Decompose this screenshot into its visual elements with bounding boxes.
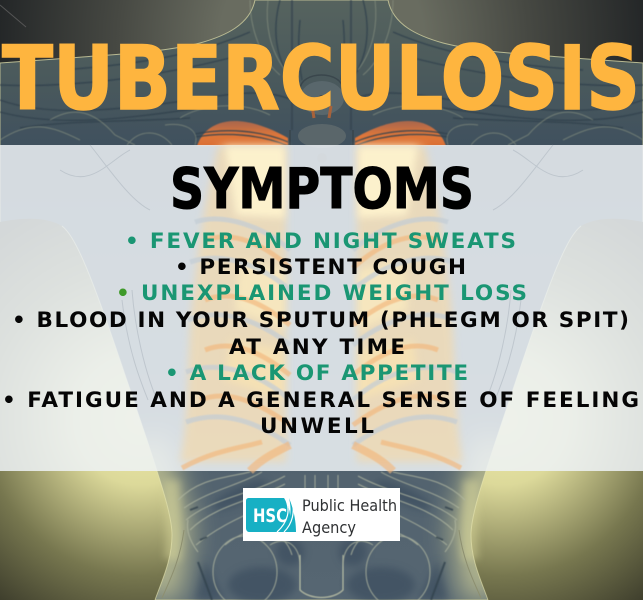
symptom: fatigue: • FATIGUE AND A GENERAL SENSE OF FEELING — [2, 388, 639, 413]
symptom: blood in sputum: • BLOOD IN YOUR SPUTUM (PHLEGM OR SPIT) — [12, 308, 629, 333]
symptom: fever and night sweats: • FEVER AND NIGHT SWEATS — [125, 229, 516, 254]
symptom: unexplained weight loss: • UNEXPLAINED WEIGHT LOSS — [116, 281, 527, 306]
symptom: persistent cough: • PERSISTENT COUGH — [175, 255, 466, 280]
chest glow through panel — [60, 145, 583, 471]
icon: HSC badge: HSC — [253, 505, 287, 527]
logo: HSC Public Health Agency — [243, 488, 400, 541]
symptom: fatigue, second line: UNWELL — [260, 414, 374, 439]
logo wordmark: Agency — [302, 518, 356, 537]
heading: symptoms: SYMPTOMS — [170, 157, 474, 222]
white translucent panel — [0, 145, 643, 471]
symptom: blood in sputum, second line: AT ANY TIME — [229, 335, 405, 360]
icon: HSC badge — [246, 498, 296, 532]
logo wordmark — [302, 496, 397, 537]
logo wordmark: Public Health — [302, 496, 397, 515]
symptom: lack of appetite: • A LACK OF APPETITE — [165, 361, 468, 386]
